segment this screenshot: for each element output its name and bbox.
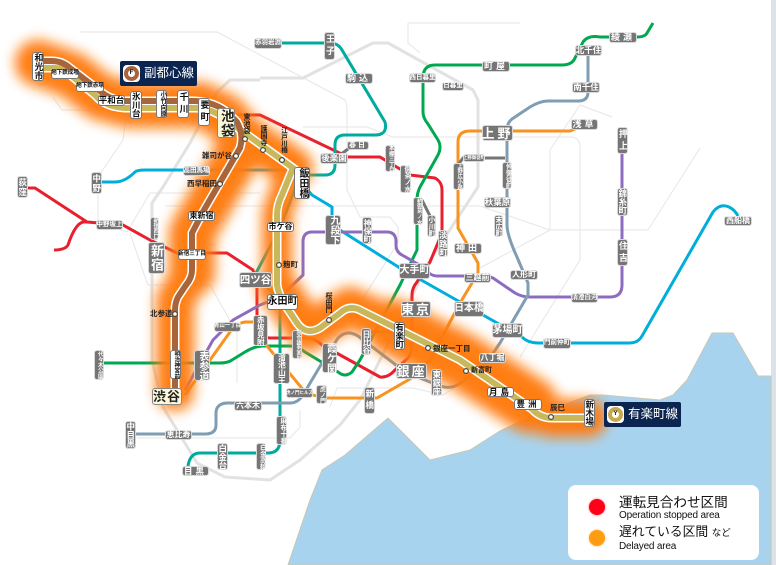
station 地下鉄赤塚: 地下鉄赤塚 xyxy=(76,83,104,89)
station 駒込: 駒込 xyxy=(347,73,371,83)
label: 副都心線: F xyxy=(130,70,133,76)
station 赤坂見附: 赤坂見附 xyxy=(256,316,265,346)
station 渋谷: 渋谷 xyxy=(153,389,181,404)
station 明治神宮前 xyxy=(170,350,181,379)
station 東京: 東京 xyxy=(401,302,431,316)
legend: delayed text: Delayed area xyxy=(619,541,676,552)
station 虎ノ門ヒルズ xyxy=(286,388,313,398)
legend: operation stopped text xyxy=(619,495,728,521)
station 神保町: 神保町 xyxy=(363,218,372,242)
station 上野御徒町 xyxy=(463,154,485,162)
station 仲御徒町: 仲御徒町 xyxy=(504,162,511,188)
station 春日: 春日 xyxy=(349,142,367,149)
Yurakucho line casing xyxy=(37,68,590,418)
station 門前仲町: 門前仲町 xyxy=(544,339,570,346)
station 浅草: 浅草 xyxy=(572,119,596,129)
station 有楽町: 有楽町 xyxy=(395,323,405,349)
station 虎ノ門ヒルズ: 虎ノ門ヒルズ xyxy=(286,390,313,395)
label: 有楽町線 xyxy=(604,402,681,427)
station 錦糸町: 錦糸町 xyxy=(618,189,628,215)
station 国会議事堂前 xyxy=(292,330,302,359)
station 池袋: 池袋 xyxy=(219,108,234,138)
station 永田町 xyxy=(267,294,298,310)
Fukutoshin line casing xyxy=(37,61,241,390)
JR loop line xyxy=(152,43,478,480)
station 桜田門: 桜田門 xyxy=(325,292,332,313)
station 茅場町: 茅場町 xyxy=(492,324,522,336)
station 日暮里 xyxy=(442,82,464,91)
station 赤羽岩淵 xyxy=(254,38,282,49)
station 新御茶ノ水: 新御茶ノ水 xyxy=(416,197,422,225)
station 麻布十番 xyxy=(276,416,287,445)
station 代々木公園: 代々木公園 xyxy=(97,351,103,379)
station 六本木: 六本木 xyxy=(236,401,260,410)
station 東銀座: 東銀座 xyxy=(432,370,442,395)
station 明治神宮前: 明治神宮前 xyxy=(173,350,179,378)
legend xyxy=(568,485,759,560)
station 新橋: 新橋 xyxy=(365,389,375,412)
Namboku line xyxy=(188,43,386,466)
station 白金高輪 xyxy=(256,443,266,470)
station 雑司が谷: 雑司が谷 xyxy=(202,151,232,160)
station 高田馬場 xyxy=(183,166,210,176)
station 御茶ノ水 xyxy=(400,165,411,193)
station 新宿西口 xyxy=(150,217,159,240)
station 虎ノ門 xyxy=(316,385,327,404)
station 末広町: 末広町 xyxy=(495,216,502,236)
station 新宿: 新宿 xyxy=(149,244,164,272)
station 地下鉄成増: 地下鉄成増 xyxy=(51,70,79,76)
station 新宿三丁目: 新宿三丁目 xyxy=(178,251,206,257)
station 霞ケ関: 霞ケ関 xyxy=(324,343,336,373)
station 清澄白河 xyxy=(571,293,598,303)
station 日比谷: 日比谷 xyxy=(362,330,371,354)
station 溜池山王 xyxy=(273,353,290,384)
station 小川町: 小川町 xyxy=(428,216,435,236)
station 九段下: 九段下 xyxy=(328,215,339,245)
station 地下鉄赤塚 xyxy=(76,82,104,92)
legend: operation stopped text: 運転見合わせ区間 xyxy=(619,495,728,510)
station 要町: 要町 xyxy=(200,100,210,124)
station 北参道: 北参道 xyxy=(150,309,172,318)
station 高田馬場: 高田馬場 xyxy=(184,167,210,174)
station 北千住: 北千住 xyxy=(576,45,601,55)
station 千川: 千川 xyxy=(178,92,188,116)
station 九段下 xyxy=(325,215,341,245)
Hibiya line xyxy=(135,50,588,434)
station 白金台: 白金台 xyxy=(218,444,228,469)
Yurakucho line xyxy=(37,68,590,418)
legend: orange dot xyxy=(589,530,605,546)
station 小竹向原 xyxy=(156,90,167,118)
station 東新宿: 東新宿 xyxy=(190,211,214,220)
Fukutoshin line xyxy=(37,61,241,390)
connector passages xyxy=(340,146,505,395)
station 西早稲田: 西早稲田 xyxy=(187,179,217,188)
station 麻布十番: 麻布十番 xyxy=(279,417,286,444)
legend: delayed text: 遅れている区間 など xyxy=(619,524,731,539)
station 西日暮里 xyxy=(409,73,436,83)
sea xyxy=(288,333,771,565)
station 代々木公園 xyxy=(94,350,104,380)
station 国会議事堂前: 国会議事堂前 xyxy=(295,330,300,359)
station 四ツ谷: 四ツ谷 xyxy=(240,274,271,286)
station 月島: 月島 xyxy=(489,387,512,397)
station 中野坂上 xyxy=(96,220,123,230)
station dots xyxy=(173,137,553,419)
station 日本橋: 日本橋 xyxy=(454,303,484,314)
station 平和台: 平和台 xyxy=(99,95,124,105)
Hanzomon line xyxy=(185,150,622,390)
station 町屋: 町屋 xyxy=(484,61,508,71)
station 中野: 中野 xyxy=(92,174,102,192)
label: 有楽町線: Y xyxy=(613,411,618,417)
station 春日 xyxy=(347,141,369,150)
station 本郷三丁目 xyxy=(385,145,395,172)
station 青山一丁目 xyxy=(214,322,241,332)
station 仲御徒町 xyxy=(502,162,512,189)
station 西船橋: 西船橋 xyxy=(726,216,750,225)
station 上野御徒町: 上野御徒町 xyxy=(463,155,485,160)
legend: delayed text xyxy=(619,524,731,552)
station 後楽園: 後楽園 xyxy=(321,153,347,163)
station 表参道: 表参道 xyxy=(197,350,208,380)
station 麹町: 麹町 xyxy=(283,260,298,269)
label: 副都心線: 副都心線 xyxy=(144,66,194,80)
station 赤羽岩淵: 赤羽岩淵 xyxy=(255,39,281,46)
station 銀座一丁目: 銀座一丁目 xyxy=(433,344,470,353)
station 綾瀬: 綾瀬 xyxy=(611,32,635,42)
Chiyoda line xyxy=(100,23,653,375)
Ginza line xyxy=(185,125,585,398)
station 人形町: 人形町 xyxy=(512,270,536,279)
right edge strip xyxy=(771,0,776,565)
station 新宿西口: 新宿西口 xyxy=(152,217,158,240)
background rail lines xyxy=(53,23,700,438)
label: 副都心線 xyxy=(120,61,197,86)
station 小竹向原: 小竹向原 xyxy=(159,91,166,117)
station 中野坂上: 中野坂上 xyxy=(96,221,122,228)
station 恵比寿: 恵比寿 xyxy=(166,430,190,439)
station 神田: 神田 xyxy=(456,243,480,253)
station 江戸川橋: 江戸川橋 xyxy=(280,127,286,153)
station 門前仲町 xyxy=(543,338,571,349)
label: 有楽町線: 有楽町線 xyxy=(628,407,678,421)
station 南千住: 南千住 xyxy=(573,82,599,92)
station 上野: 上野 xyxy=(482,126,514,140)
legend: red dot xyxy=(589,499,605,515)
station 淡路町: 淡路町 xyxy=(438,231,448,256)
station 市ケ谷: 市ケ谷 xyxy=(268,222,292,231)
station 青山一丁目: 青山一丁目 xyxy=(214,323,241,329)
station 豊洲: 豊洲 xyxy=(516,399,540,409)
station 王子: 王子 xyxy=(325,34,335,58)
station 新御茶ノ水 xyxy=(413,197,423,225)
station 西日暮里: 西日暮里 xyxy=(410,74,436,81)
station 荻窪: 荻窪 xyxy=(18,178,28,196)
station 大手町 xyxy=(399,263,430,279)
station 日暮里: 日暮里 xyxy=(443,82,463,89)
station 永田町: 永田町 xyxy=(268,296,298,307)
station 新富町: 新富町 xyxy=(471,367,492,374)
station 東池袋: 東池袋 xyxy=(243,113,250,134)
station 氷川台: 氷川台 xyxy=(131,92,141,118)
station 中目黒: 中目黒 xyxy=(126,422,136,448)
station 大手町: 大手町 xyxy=(400,265,430,276)
station 御茶ノ水: 御茶ノ水 xyxy=(403,165,410,193)
station 上野広小路 xyxy=(453,163,464,190)
station 目黒: 目黒 xyxy=(184,466,207,476)
station 虎ノ門: 虎ノ門 xyxy=(318,386,324,404)
station 表参道 xyxy=(194,350,210,381)
delay glow xyxy=(38,63,588,418)
station 秋葉原: 秋葉原 xyxy=(485,197,510,207)
station 飯田橋: 飯田橋 xyxy=(297,168,308,198)
legend: operation stopped text: Operation stopped area xyxy=(619,510,720,521)
Tozai line xyxy=(101,170,738,343)
station 飯田橋 xyxy=(294,167,310,199)
station 八丁堀: 八丁堀 xyxy=(480,353,504,362)
station 上野広小路: 上野広小路 xyxy=(456,163,462,190)
station 赤坂見附 xyxy=(253,315,268,346)
station 三越前: 三越前 xyxy=(466,273,490,282)
station 辰巳: 辰巳 xyxy=(550,403,565,412)
station 清澄白河: 清澄白河 xyxy=(572,294,598,301)
station 本郷三丁目: 本郷三丁目 xyxy=(388,145,394,172)
station 押上: 押上 xyxy=(618,128,628,152)
station 白金高輪: 白金高輪 xyxy=(258,444,265,470)
station 新宿三丁目 xyxy=(178,249,206,260)
station 護国寺: 護国寺 xyxy=(260,125,267,146)
station 溜池山王: 溜池山王 xyxy=(277,353,286,384)
Marunouchi line xyxy=(27,115,442,377)
station 銀座: 銀座 xyxy=(396,364,427,378)
station 新木場: 新木場 xyxy=(585,400,595,426)
station 地下鉄成増 xyxy=(51,69,79,79)
station 和光市: 和光市 xyxy=(34,53,44,80)
station 日本橋 xyxy=(454,301,484,317)
station 住吉: 住吉 xyxy=(618,240,628,264)
